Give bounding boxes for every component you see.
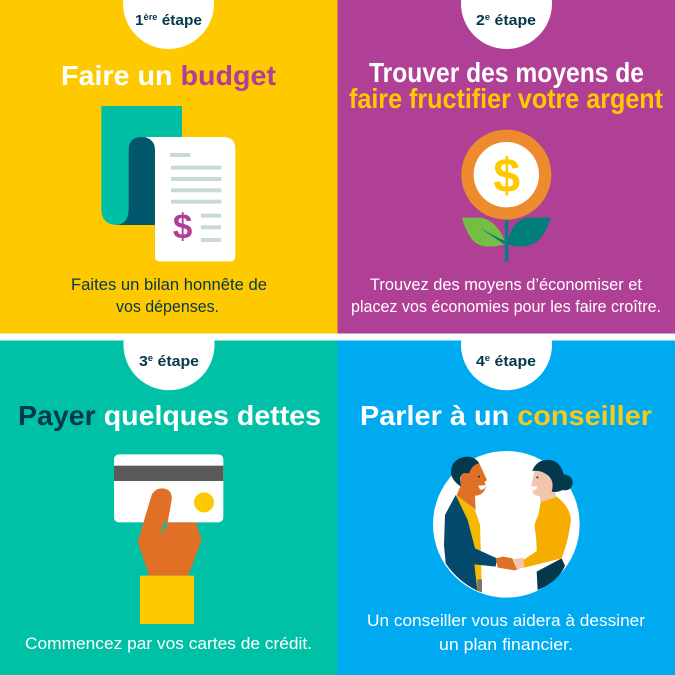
step 1 badge xyxy=(123,0,214,49)
panel: step 1 xyxy=(0,0,338,334)
step 4 body text: Un conseiller vous aidera à dessiner xyxy=(367,612,646,630)
step 3 badge: 3 xyxy=(139,353,147,370)
man xyxy=(444,457,522,593)
step 1 body text: Faites un bilan honnête de xyxy=(71,276,267,294)
step 3 heading: Payer quelques dettes xyxy=(18,400,321,431)
icon: money flower xyxy=(461,130,551,262)
step 3 badge: étape xyxy=(153,353,199,370)
icon: budget document: $ xyxy=(173,207,192,246)
step 4 body text: un plan financier. xyxy=(439,636,573,654)
step 2 badge: étape xyxy=(490,12,536,29)
step 2 badge xyxy=(461,0,552,49)
step 1 body text: vos dépenses. xyxy=(116,298,219,316)
step 1 badge: 1 xyxy=(135,12,143,29)
step 3 badge: e xyxy=(148,353,153,363)
step 4 badge: 4 xyxy=(476,353,484,370)
step 2 heading xyxy=(349,57,663,114)
step 1 body text xyxy=(71,276,267,316)
panel: step 3 xyxy=(0,340,338,675)
step 1 heading: Faire un budget xyxy=(61,60,276,91)
step 4 badge: e xyxy=(485,353,490,363)
step 4 heading: Parler à un conseiller xyxy=(360,400,652,431)
icon: hand holding credit card xyxy=(114,454,223,624)
step 2 heading: Trouver des moyens de xyxy=(369,57,644,88)
step 3 badge xyxy=(124,340,214,390)
icon: advisor handshake xyxy=(433,451,580,598)
step 1 badge: ère xyxy=(144,12,157,22)
icon: money flower: $ xyxy=(493,149,520,203)
icon: budget document xyxy=(101,106,235,261)
woman xyxy=(512,460,573,590)
panel: step 2 xyxy=(338,0,675,334)
step 2 body text: Trouvez des moyens d’économiser et xyxy=(370,276,642,294)
step 2 badge: 2 xyxy=(476,12,484,29)
step 4 badge xyxy=(461,340,552,390)
step 4 body text xyxy=(367,612,646,654)
panel: step 4 xyxy=(338,340,675,675)
step 1 badge: étape xyxy=(157,12,202,29)
step 4 badge: étape xyxy=(490,353,536,370)
step 2 badge: e xyxy=(485,12,490,22)
step 2 body text xyxy=(351,276,661,316)
step 3 body text: Commencez par vos cartes de crédit. xyxy=(25,635,312,653)
step 2 body text: placez vos économies pour les faire croître. xyxy=(351,298,661,316)
